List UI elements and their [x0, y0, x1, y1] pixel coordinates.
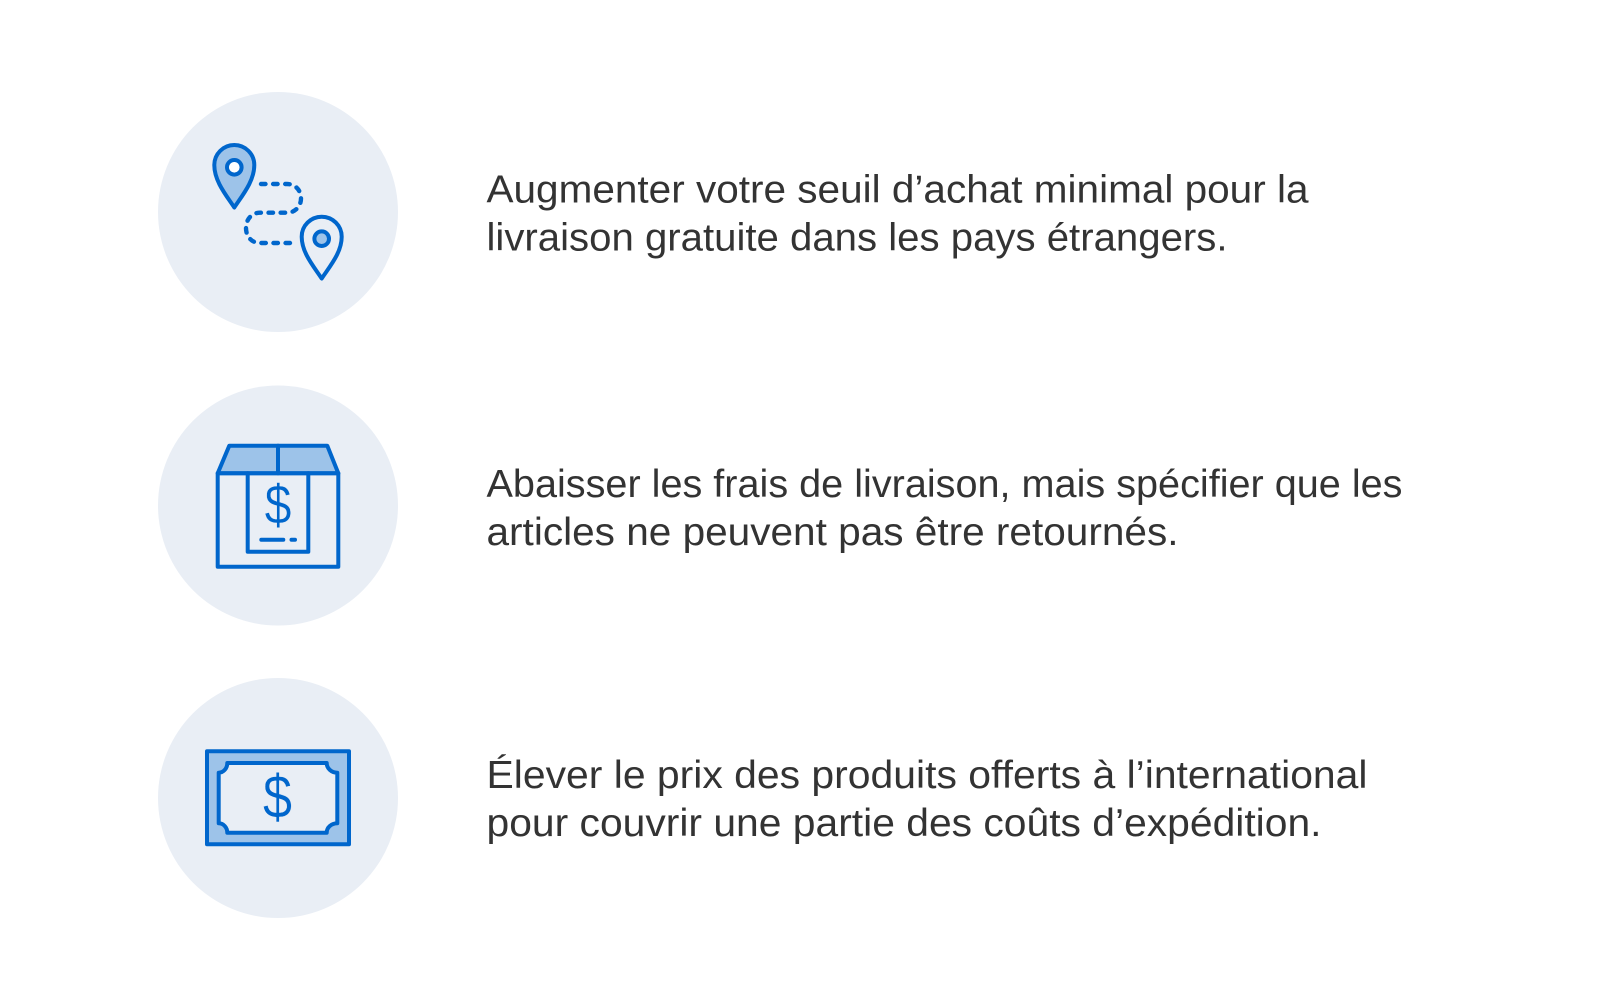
row 2: lower shipping fees: [158, 386, 1413, 626]
text: raise product prices: Élever le prix des produits offerts à l’international: [486, 754, 1368, 797]
banknote inner panel: [219, 763, 337, 833]
text: raise free shipping threshold: Augmenter votre seuil d’achat minimal pour la: [486, 168, 1309, 212]
dollar sign: $: [263, 763, 292, 832]
row 1: free shipping threshold: [158, 92, 1319, 332]
map pin: origin: [214, 145, 254, 208]
icon: banknote: [158, 678, 398, 918]
dollar sign: $: [265, 475, 291, 537]
icon: box with price tag: [158, 386, 398, 626]
label lines: [261, 538, 295, 542]
icon background circle: [158, 678, 398, 918]
box lid: [218, 446, 338, 473]
text: lower fees, no returns: Abaisser les frais de livraison, mais spécifier que les: [486, 463, 1402, 506]
text: raise product prices: pour couvrir une partie des coûts d’expédition.: [486, 802, 1322, 845]
icon background circle: [158, 386, 398, 626]
text: raise free shipping threshold: livraison gratuite dans les pays étrangers.: [486, 216, 1228, 260]
row 3: raise international prices: [158, 678, 1378, 918]
lid center seam: [276, 446, 280, 473]
text: lower fees, no returns: articles ne peuvent pas être retournés.: [486, 511, 1178, 554]
price label: [248, 473, 308, 552]
box body: [218, 473, 338, 567]
dashed route: [246, 184, 301, 243]
icon background circle: [158, 92, 398, 332]
icon: route between two map pins: [158, 92, 398, 332]
banknote outer frame: [207, 751, 349, 844]
map pin: destination: [302, 217, 342, 278]
